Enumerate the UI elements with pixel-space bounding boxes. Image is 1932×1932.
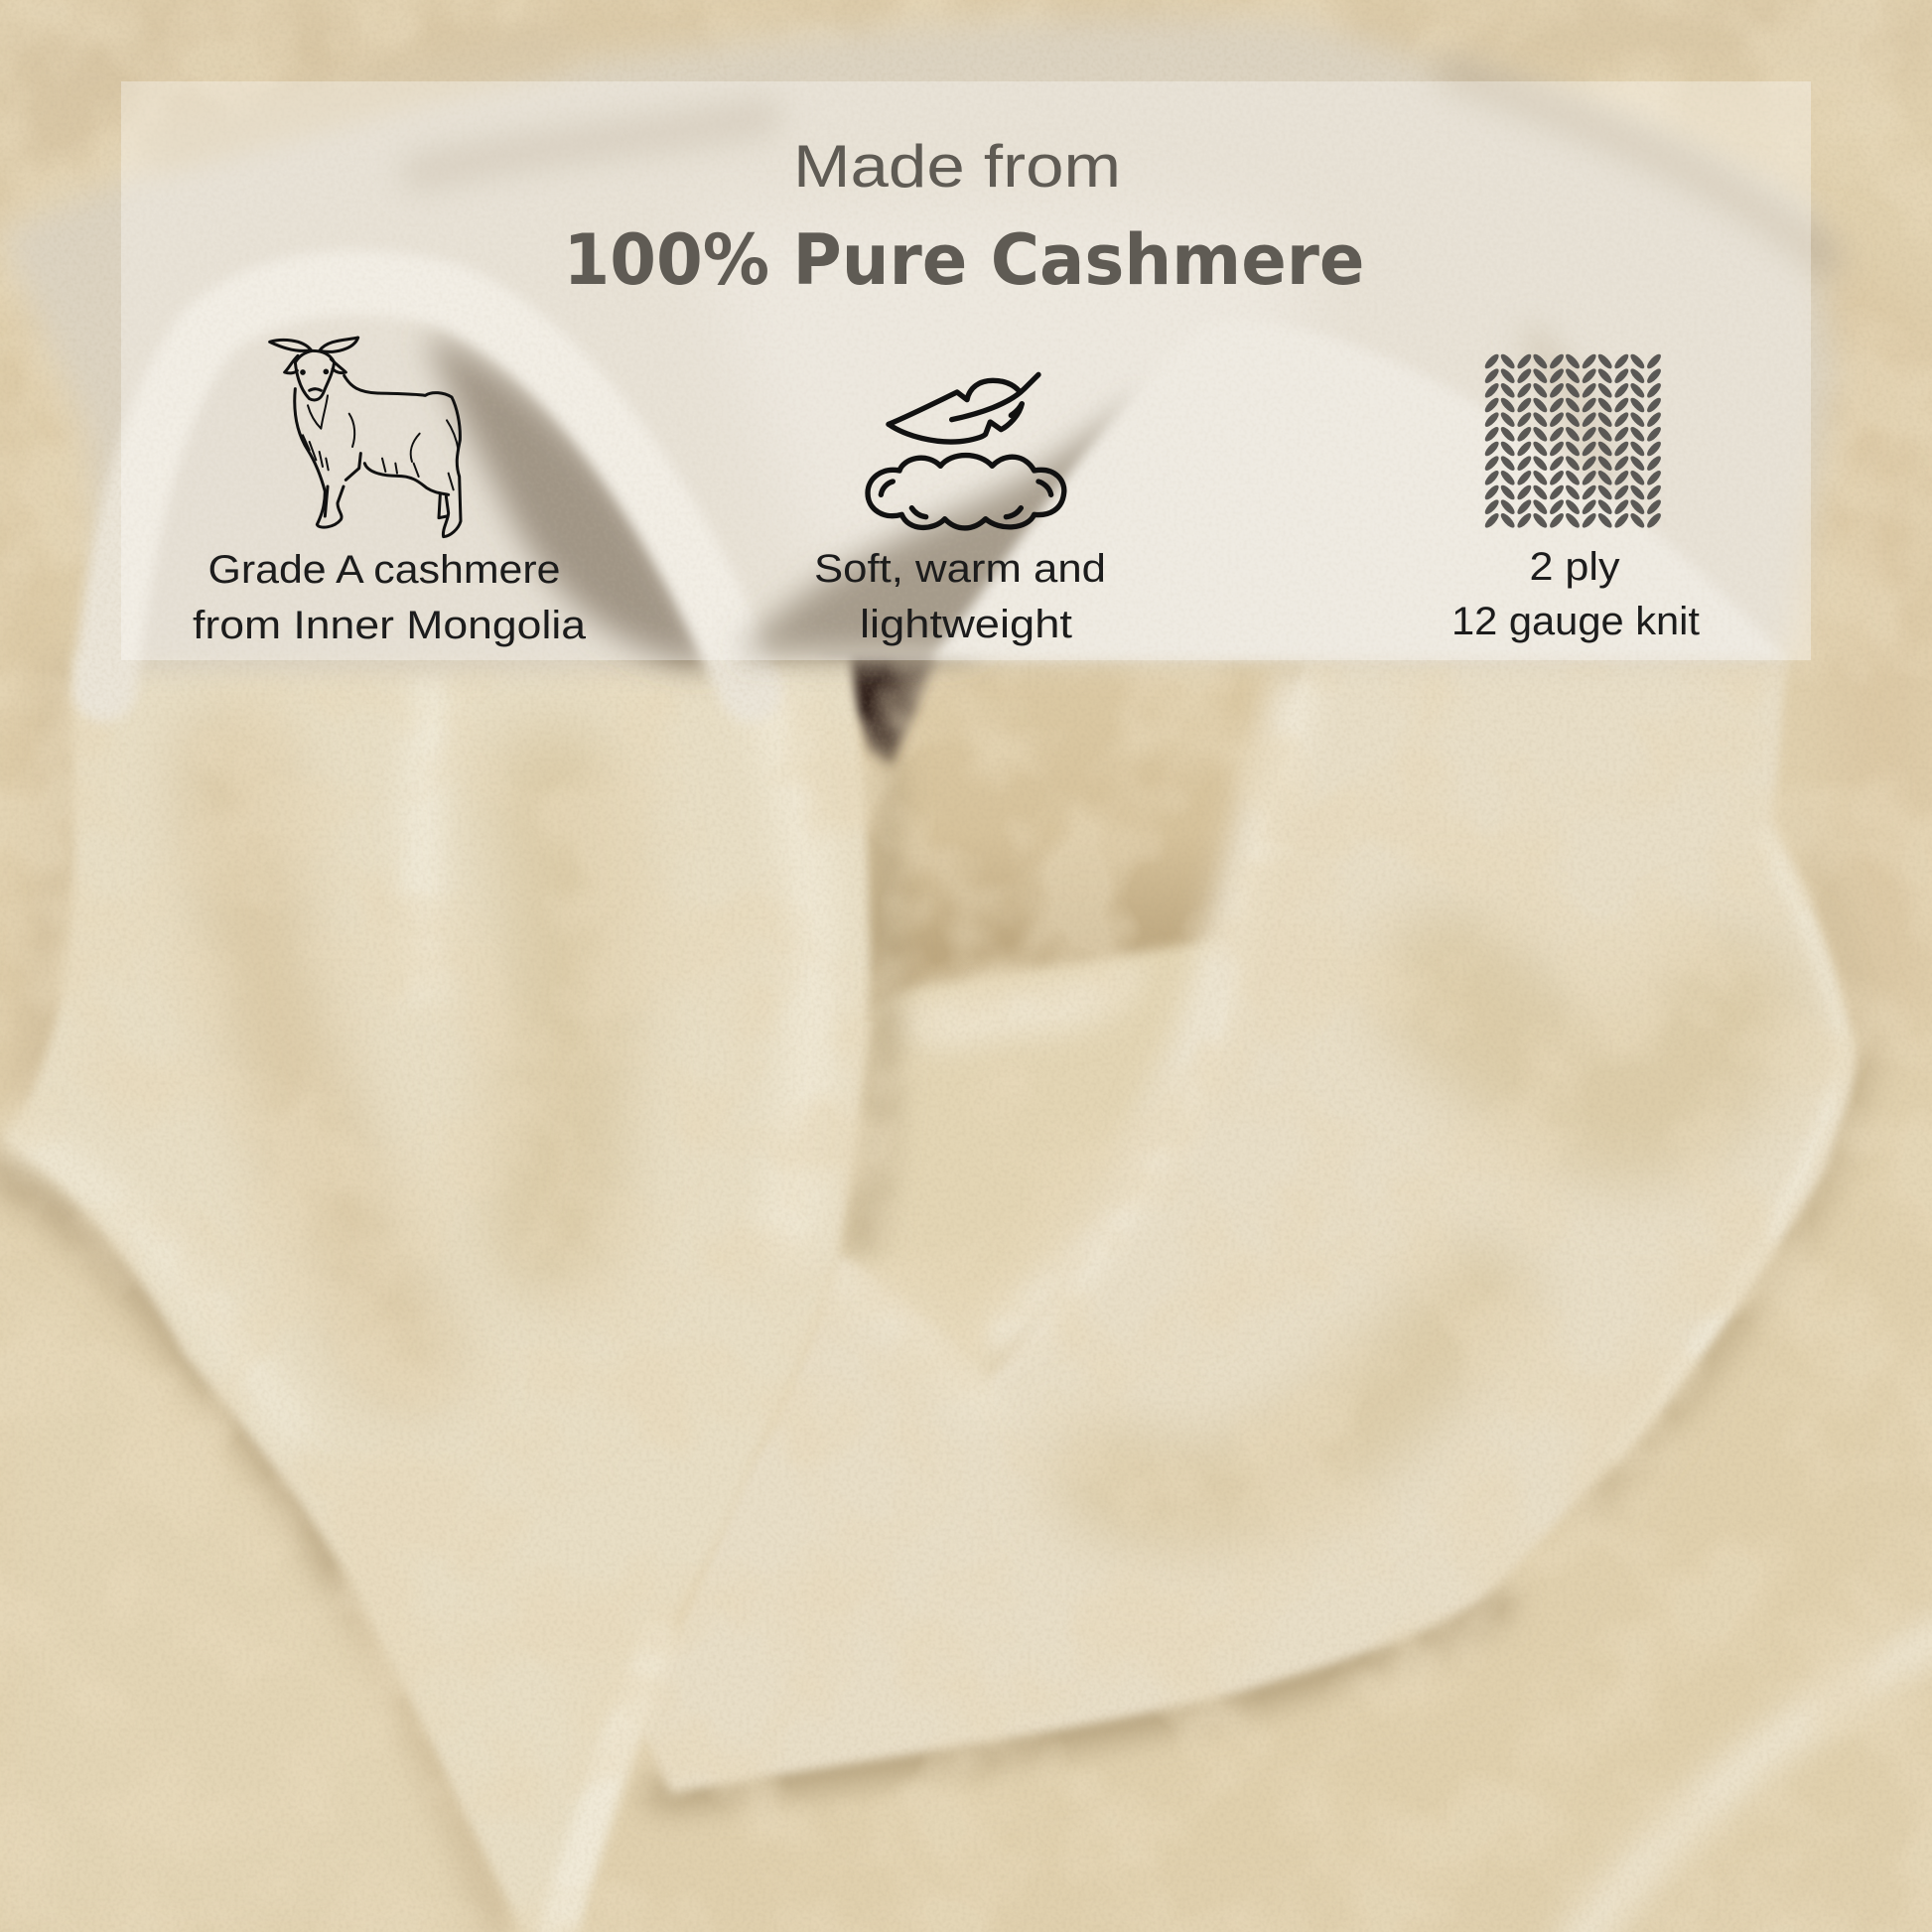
- panel background: [121, 81, 1811, 660]
- feature text: goat: [193, 548, 587, 647]
- feature text: knit: 12 gauge knit: [1451, 600, 1700, 643]
- feather: [889, 374, 1038, 442]
- feature text: goat: from Inner Mongolia: [193, 604, 587, 647]
- title: 100% Pure Cashmere: 100% Pure Cashmere: [564, 219, 1364, 301]
- feature text: softness: [814, 547, 1106, 646]
- feature text: knit: [1451, 545, 1700, 643]
- dark gap in the fabric folds: [819, 653, 939, 766]
- arch interior with shadow: [111, 338, 709, 665]
- fabric arch highlight: [104, 283, 752, 690]
- upper fabric behind panel: [0, 20, 1836, 659]
- icon: goat: [270, 338, 461, 537]
- lower right band: [1578, 1632, 1932, 1932]
- cloud: [868, 456, 1064, 528]
- crease shadows beneath lobes: [0, 653, 1872, 1932]
- right fabric lobe: [640, 653, 1855, 1793]
- inner lobe: [850, 936, 1232, 1386]
- feature text: knit: 2 ply: [1529, 545, 1620, 589]
- icon: knit stitch pattern: [1483, 352, 1663, 530]
- left fabric lobe: [6, 653, 871, 1932]
- icon: feather over cloud: [868, 374, 1064, 528]
- feature text: goat: Grade A cashmere: [208, 548, 560, 592]
- feature text: softness: lightweight: [860, 603, 1072, 646]
- central hollow: [850, 653, 1330, 1023]
- title: Made from: Made from: [793, 133, 1121, 200]
- second fold shadow: [740, 394, 1152, 653]
- feature text: softness: Soft, warm and: [814, 547, 1106, 591]
